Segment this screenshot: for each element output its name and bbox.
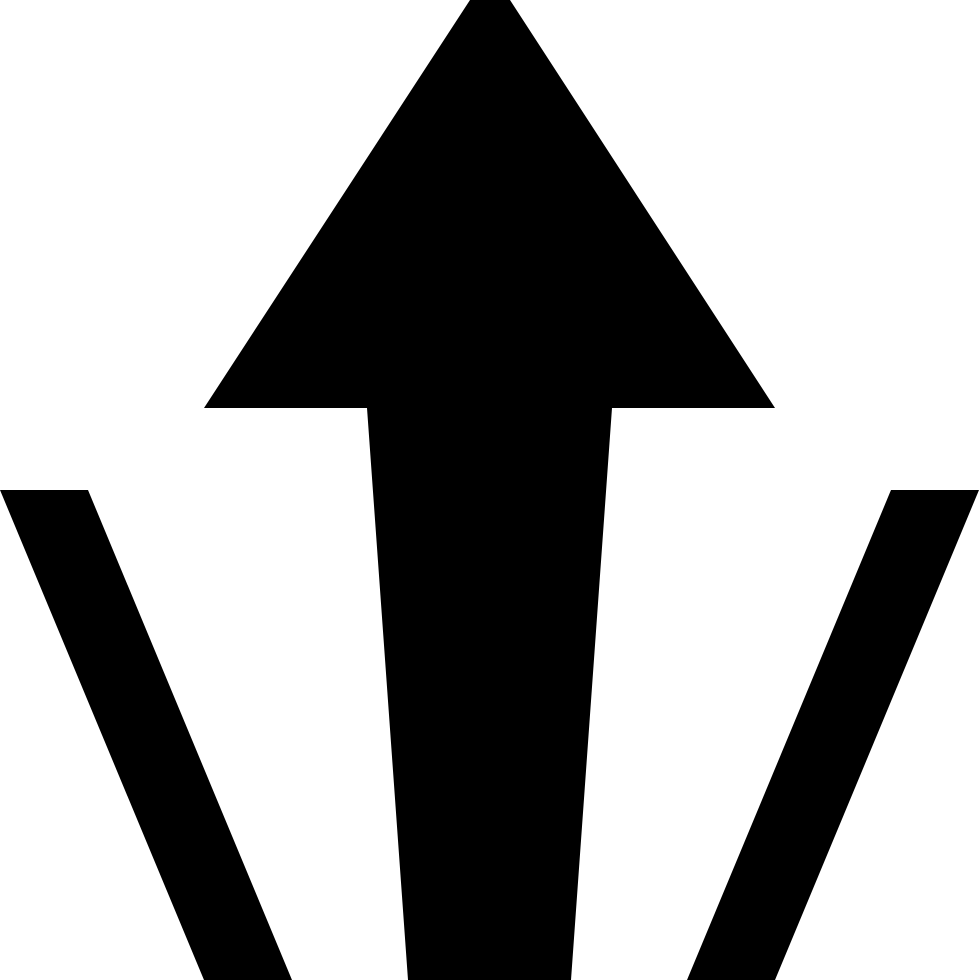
stroke: right diagonal bar [687, 490, 979, 980]
stroke: left diagonal bar [0, 490, 292, 980]
arrow: central upward arrow [204, 0, 775, 980]
